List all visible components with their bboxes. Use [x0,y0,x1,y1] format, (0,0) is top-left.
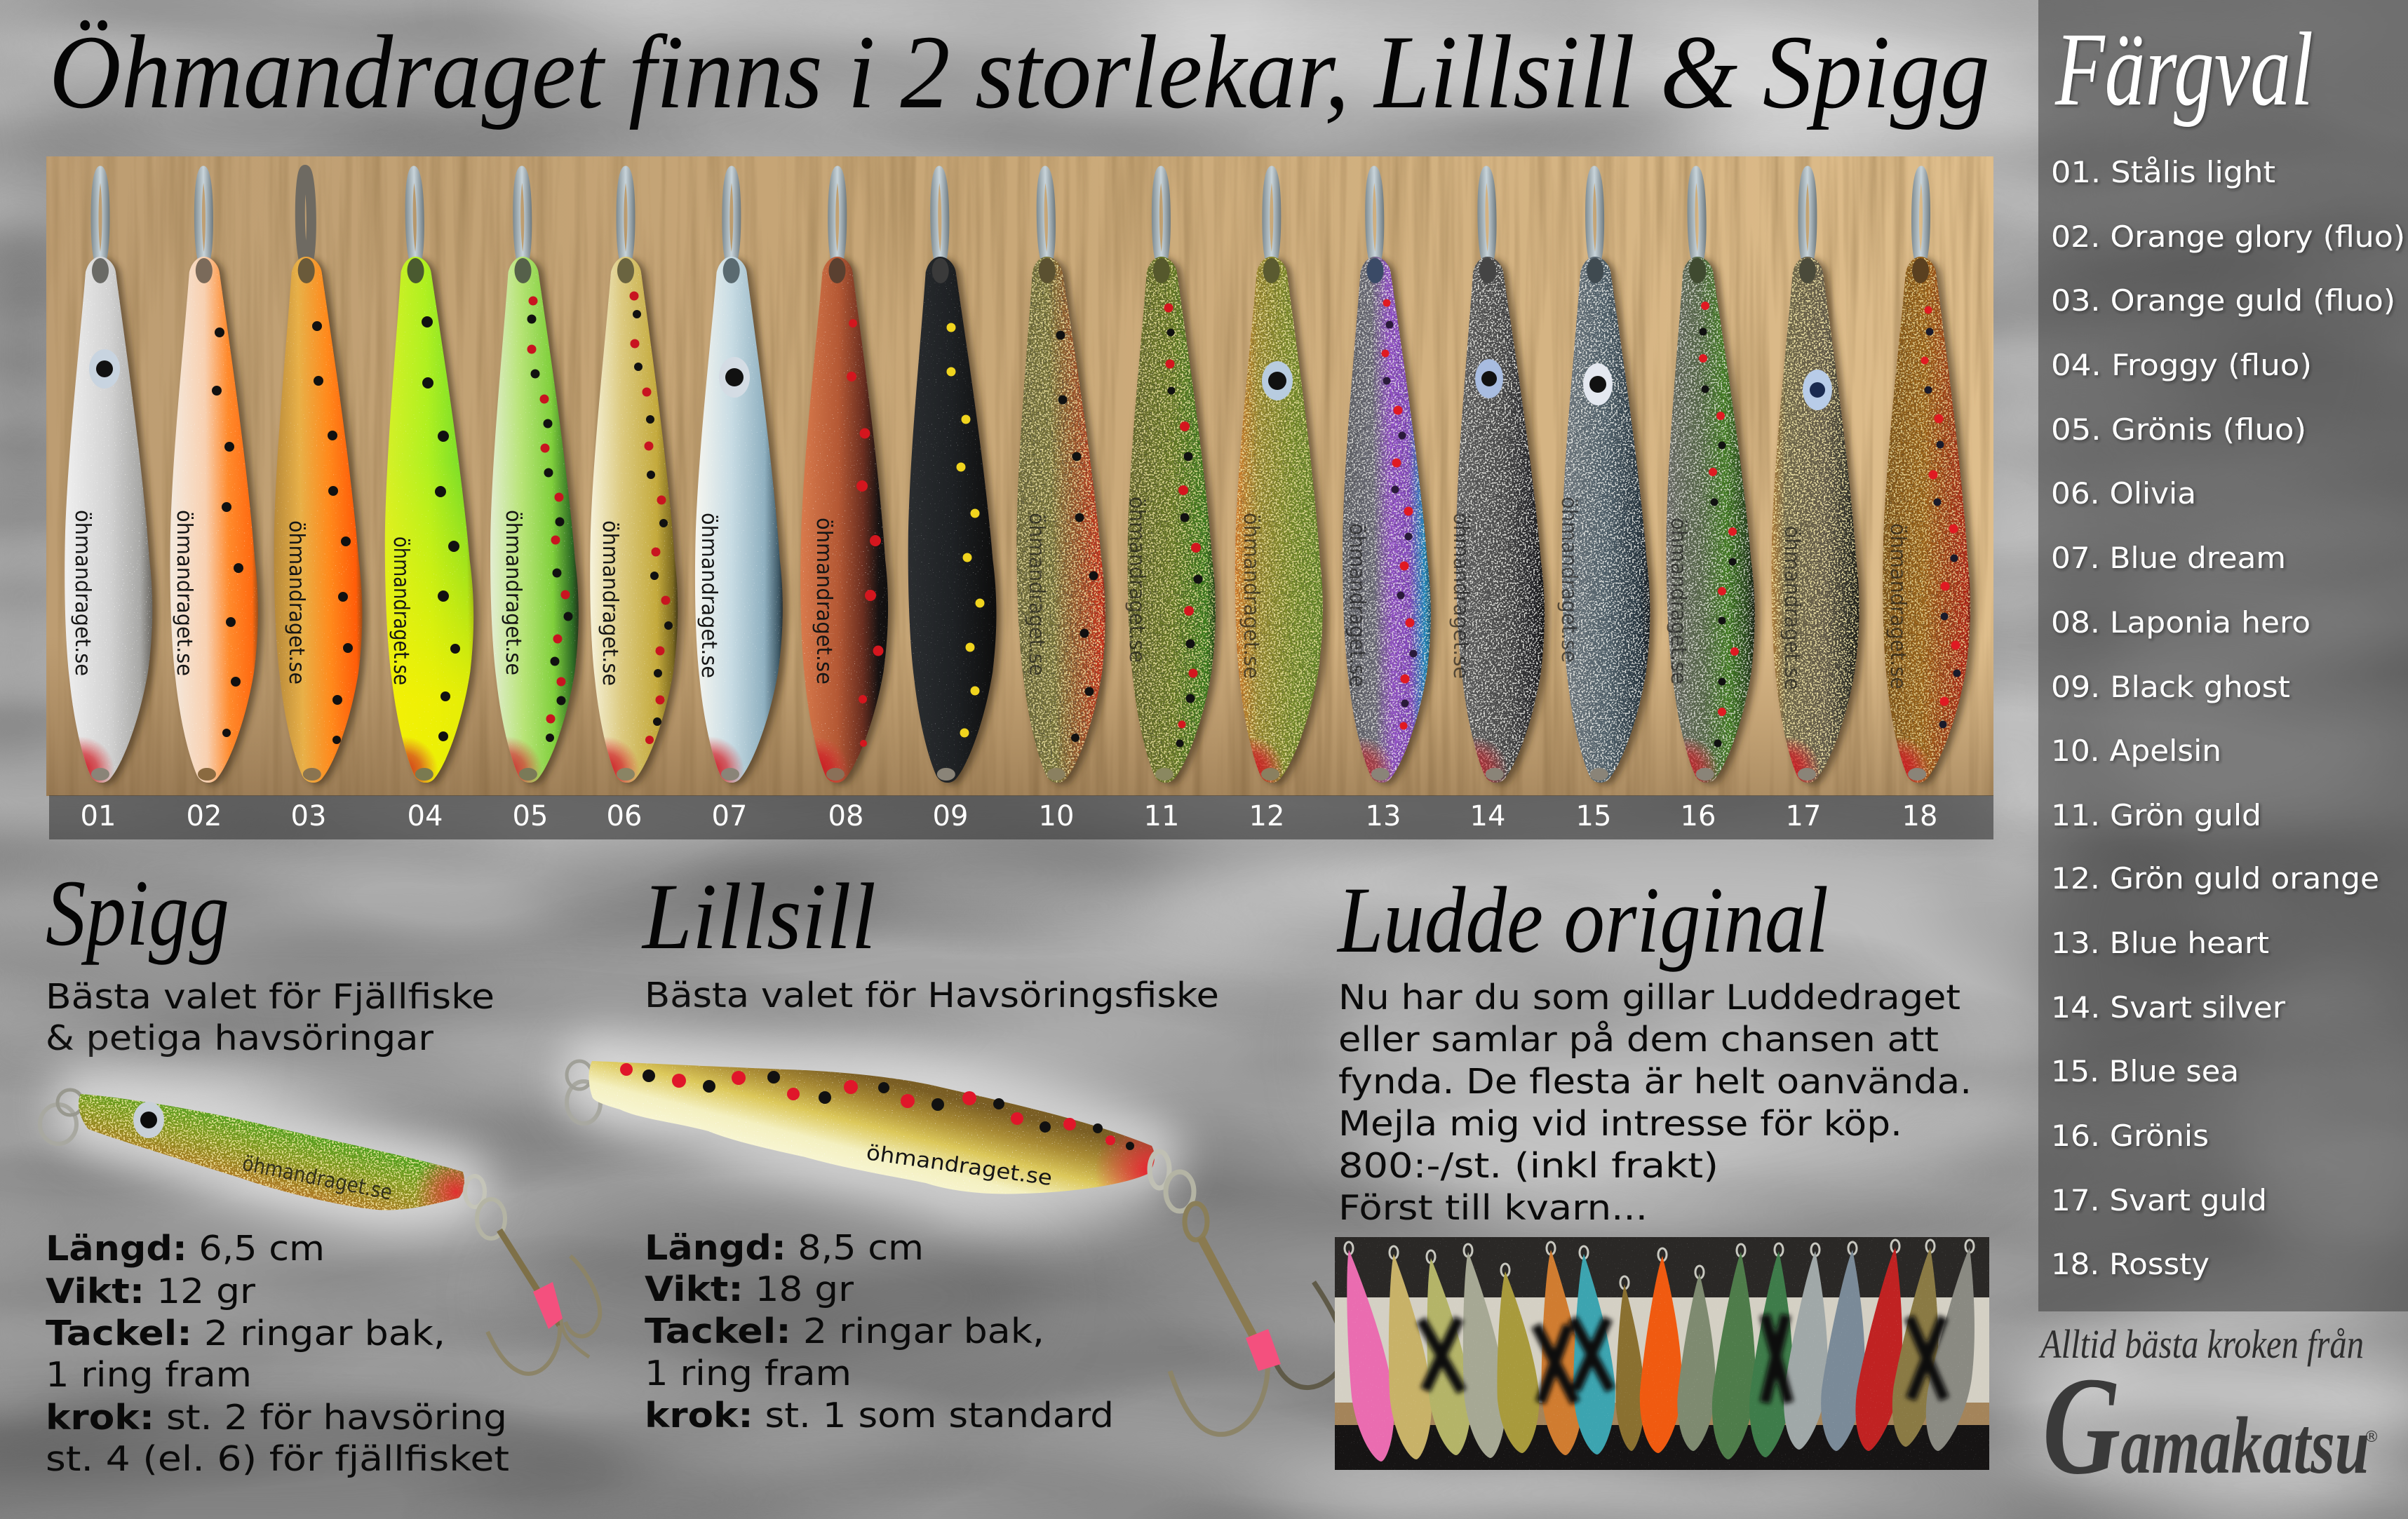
lure 02 [161,170,264,788]
lure number strip: 03 [291,800,326,832]
lure 17 [1765,170,1864,788]
lure number strip: 11 [1144,800,1179,832]
Spigg specifications: st. 4 (el. 6) för fjällfisket [46,1439,509,1479]
lure 01: öhmandraget.se [70,510,95,676]
Spigg specifications: krok: st. 2 för havsöring [46,1398,507,1438]
lure 15: öhmandraget.se [1556,497,1581,663]
lure number strip: 07 [712,800,747,832]
Lillsill specifications [645,1228,1114,1436]
Lillsill specifications: Tackel: 2 ringar bak, [645,1311,1044,1351]
lure 15 [1552,170,1656,788]
colour name list: 17. Svart guld [2051,1183,2267,1217]
lure 11: öhmandraget.se [1124,497,1149,663]
lure number strip: 05 [513,800,548,832]
colour name list: 03. Orange guld (fluo) [2051,283,2395,318]
lure 12: öhmandraget.se [1239,513,1263,679]
colour name list: 02. Orange glory (fluo) [2051,220,2405,254]
lure 05 [480,170,585,788]
colour name list: 18. Rossty [2051,1247,2209,1281]
lure number strip: 10 [1039,800,1074,832]
colour name list: 08. Laponia hero [2051,605,2311,640]
lure number strip: 13 [1366,800,1401,832]
sold-out X marks [1421,1315,1944,1403]
lure 18 [1875,170,1978,788]
Ludde description: eller samlar på dem chansen att [1338,1020,1939,1060]
lure number strip [49,795,1993,839]
colour name list: 01. Stålis light [2051,155,2275,189]
panel: wooden board with 18 lures [46,156,1993,796]
Spigg specifications: 1 ring fram [46,1355,252,1395]
lure number strip: 14 [1470,800,1505,832]
Ludde description: fynda. De flesta är helt oanvända. [1338,1062,1972,1102]
photo of Ludde lures [1329,1237,1992,1470]
Lillsill lure image [567,1055,1344,1434]
panel: Spigg [40,861,600,1479]
lure 16: öhmandraget.se [1666,518,1690,684]
colour name list: 05. Grönis (fluo) [2051,412,2306,447]
lure number strip: 08 [828,800,863,832]
colour name list [2051,155,2405,1281]
Spigg description: Bästa valet för Fjällfiske [46,977,495,1017]
lure 13 [1332,170,1437,788]
colour name list: 16. Grönis [2051,1119,2209,1153]
Spigg specifications: Tackel: 2 ringar bak, [46,1314,445,1353]
lure number strip: 09 [933,800,968,832]
lure 18: öhmandraget.se [1885,523,1910,689]
logo: Gamakatsu: ® [2364,1429,2379,1446]
lure 04 [372,170,481,788]
lure 02: öhmandraget.se [172,510,196,676]
colour name list: 07. Blue dream [2051,541,2286,575]
Spigg specifications: Vikt: 12 gr [46,1271,256,1311]
lure 04: öhmandraget.se [389,536,413,685]
panel: Lillsill [567,865,1344,1436]
lure 17: öhmandraget.se [1780,526,1804,690]
Lillsill specifications: Vikt: 18 gr [645,1269,854,1309]
colour name list: 12. Grön guld orange [2051,861,2379,896]
lure number strip: 06 [607,800,642,832]
lure number strip: 17 [1786,800,1821,832]
panel: colour list sidebar [2038,0,2408,1311]
heading: Färgval: Färgval [2054,11,2313,128]
lure 06 [584,170,682,788]
lure 14: öhmandraget.se [1448,513,1473,679]
heading: Ludde original: Ludde original [1336,868,1829,973]
lure 03 [263,170,369,788]
lure 08: öhmandraget.se [812,518,836,684]
lure 08 [793,170,894,788]
title: Öhmandraget finns i 2 storlekar, Lillsill & Spigg [49,14,1990,130]
Lillsill specifications: 1 ring fram [645,1353,852,1393]
lure number strip: 04 [408,800,443,832]
colour name list: 09. Black ghost [2051,670,2290,704]
Spigg lure image: öhmandraget.se [240,1152,394,1206]
lure 03: öhmandraget.se [284,520,309,684]
Ludde description [1338,978,1972,1228]
lure number strip: 01 [81,800,116,832]
colour name list: 13. Blue heart [2051,926,2269,960]
lure 10: öhmandraget.se [1024,513,1049,676]
Lillsill specifications: Längd: 8,5 cm [645,1228,924,1268]
lure 07 [688,170,788,788]
lure 01 [58,170,157,788]
Spigg lure image [40,1087,600,1374]
lure number strip: 12 [1249,800,1284,832]
Lillsill description: Bästa valet för Havsöringsfiske [645,975,1219,1015]
colour name list: 10. Apelsin [2051,734,2221,768]
colour name list: 11. Grön guld [2051,798,2261,832]
colour name list: 15. Blue sea [2051,1054,2239,1088]
lure number strip: 02 [187,800,222,832]
lure number strip: 18 [1902,800,1937,832]
lure number strip: 16 [1681,800,1716,832]
Spigg description: & petiga havsöringar [46,1018,434,1058]
lure 13: öhmandraget.se [1345,523,1369,687]
lure 10 [1003,170,1113,788]
lure 11 [1119,170,1221,788]
panel: Ludde original [1329,868,1992,1470]
lure 05: öhmandraget.se [501,510,525,675]
Spigg specifications [46,1229,509,1479]
Ludde description: Nu har du som gillar Luddedraget [1338,978,1960,1018]
heading: Lillsill: Lillsill [641,865,876,969]
Ludde description: Mejla mig vid intresse för köp. [1338,1104,1902,1144]
lure 16 [1654,170,1762,788]
lure 07: öhmandraget.se [697,513,721,678]
Lillsill lure image: öhmandraget.se [865,1140,1054,1191]
colour name list: 06. Olivia [2051,476,2196,511]
Lillsill specifications: krok: st. 1 som standard [645,1396,1114,1436]
Ludde description: 800:-/st. (inkl frakt) [1338,1146,1718,1186]
colour name list: 04. Froggy (fluo) [2051,348,2312,382]
lure number strip: 15 [1576,800,1611,832]
lure 12 [1228,170,1329,788]
lure 14 [1444,170,1552,788]
lure 09 [897,170,1003,788]
lure 06: öhmandraget.se [598,520,622,686]
colour name list: 14. Svart silver [2051,990,2286,1025]
Spigg specifications: Längd: 6,5 cm [46,1229,325,1269]
Spigg description [46,977,495,1058]
Ludde description: Först till kvarn... [1338,1188,1648,1228]
heading: Spigg: Spigg [46,861,229,966]
